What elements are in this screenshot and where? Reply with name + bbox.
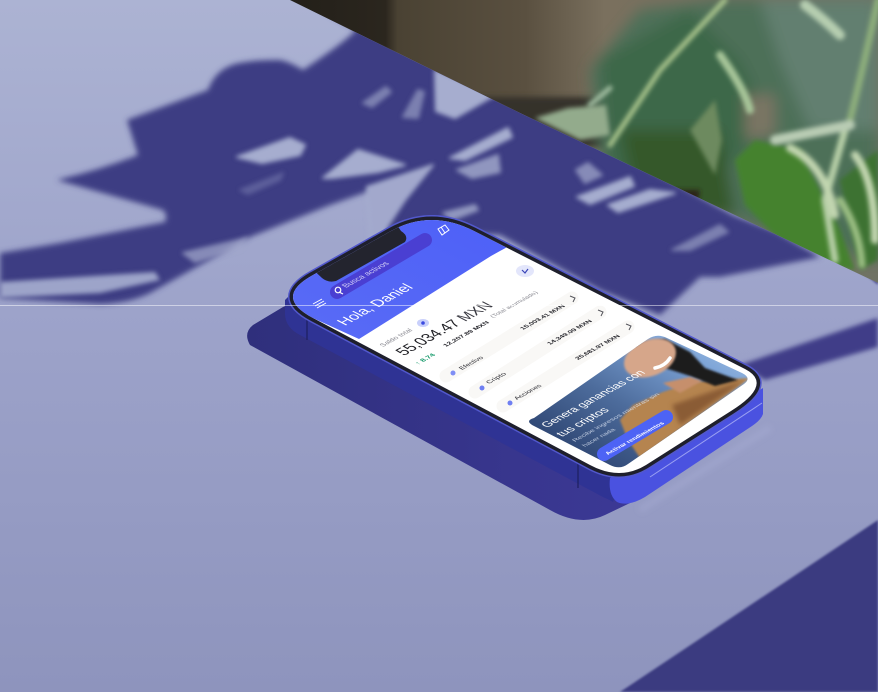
banner headline: Genera ganancias con [539,369,648,429]
banner background [529,336,748,468]
greeting: Hola, Daniel [334,282,417,328]
row: acciones: Acciones [513,384,544,401]
side highlight line [650,403,762,477]
side seams [307,317,578,488]
row: efectivo: Efectivo [458,355,486,371]
screen contents [293,220,757,473]
glow beside phone [640,428,770,510]
phone rim [293,220,757,473]
phone [285,215,763,504]
shadow: right corner [868,278,878,286]
shadow: right streak [740,318,878,380]
notch [316,228,406,282]
row: cripto: Cripto [485,372,509,385]
search placeholder: Busca activos [339,260,392,289]
banner button: Activar rendimientos [604,421,667,456]
row: cripto: 14,349.09 MXN [546,319,594,346]
woman shirt [620,378,750,458]
banner [529,336,748,468]
gain amount: 12,207.89 MXN [442,321,492,348]
row: acciones: 25,681.97 MXN [574,334,622,361]
thin horizontal line [0,305,878,306]
woman hair [632,339,738,386]
menu icon [313,299,326,308]
background: plant behind table [270,0,878,300]
shadow: main plant silhouette [0,0,820,315]
phone short side [610,388,763,504]
phone long side [285,285,625,502]
eye icon [417,319,429,327]
woman hand [663,377,702,393]
shirt shading [672,380,745,425]
phone bezel [293,220,757,473]
woman smile [655,358,670,368]
banner subtext: Recibe ingresos mientras sin [571,393,662,443]
accumulated label: (Total acumulado) [489,291,540,319]
total label: Saldo total [379,328,415,348]
banner subtext [571,393,662,448]
screen white background [293,220,757,473]
total amount: 55,034.47 MXN [392,299,497,358]
phone drop shadow pad [247,300,640,520]
row: efectivo: 15,003.41 MXN [519,304,567,331]
shadow: bottom right corner [620,520,878,692]
blue header [293,220,506,339]
search icon [335,287,343,294]
gift icon [438,225,449,235]
white rows [446,298,628,406]
light patches inside shadow [0,70,728,298]
row: acciones [508,324,631,406]
woman face [622,337,678,379]
gain percent: ↑ 8.74 [414,353,438,366]
check pill [516,265,534,277]
row: efectivo [450,296,575,376]
banner headline: tus criptos [554,406,613,438]
banner subtext: hacer nada [581,428,618,448]
search pill [337,240,425,292]
row: cripto [480,310,603,390]
